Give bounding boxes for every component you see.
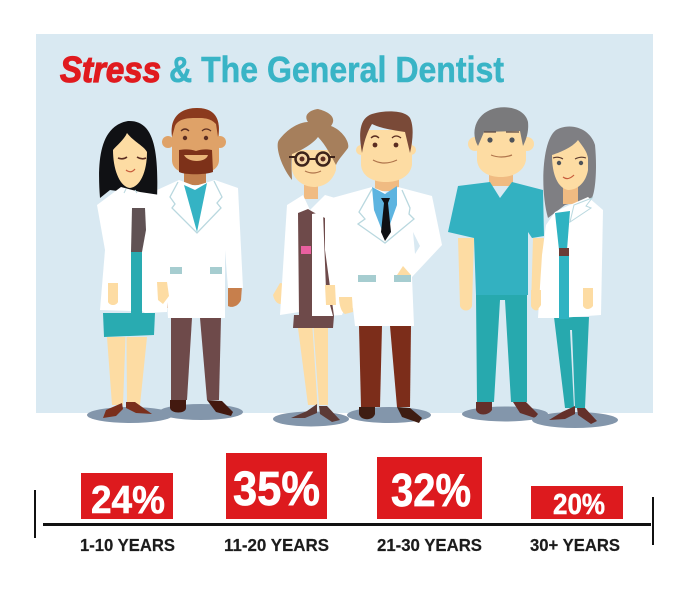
panel: background [36, 34, 653, 413]
bar: 1-10 years: 24% [91, 479, 165, 522]
figure: man in teal scrubs [448, 107, 548, 422]
title [60, 49, 504, 90]
bar: 30+ years: 30+ YEARS [530, 535, 620, 555]
bar: 21-30 years [377, 457, 482, 555]
title: Stress [60, 49, 161, 90]
figure: man with beard [157, 108, 243, 420]
bar: 30+ years [530, 486, 623, 555]
figure: woman with black hair [87, 121, 173, 423]
bar: 21-30 years: 32% [391, 464, 471, 516]
bar: 11-20 years: 35% [233, 463, 320, 516]
bar: 11-20 years: 11-20 YEARS [224, 535, 329, 555]
bar: 1-10 years [80, 473, 175, 555]
bar: 1-10 years: 1-10 YEARS [80, 535, 175, 555]
title: & The General Dentist [169, 49, 504, 90]
bar chart: stress by years in practice [34, 453, 654, 555]
bar: 11-20 years [224, 453, 329, 555]
figure: woman with grey hair [531, 126, 618, 428]
figure: man with black tie [332, 111, 442, 423]
axis [34, 490, 654, 545]
bar: 21-30 years: 21-30 YEARS [377, 535, 482, 555]
figure: woman with glasses [273, 109, 349, 426]
bar: 30+ years: 20% [553, 489, 605, 521]
